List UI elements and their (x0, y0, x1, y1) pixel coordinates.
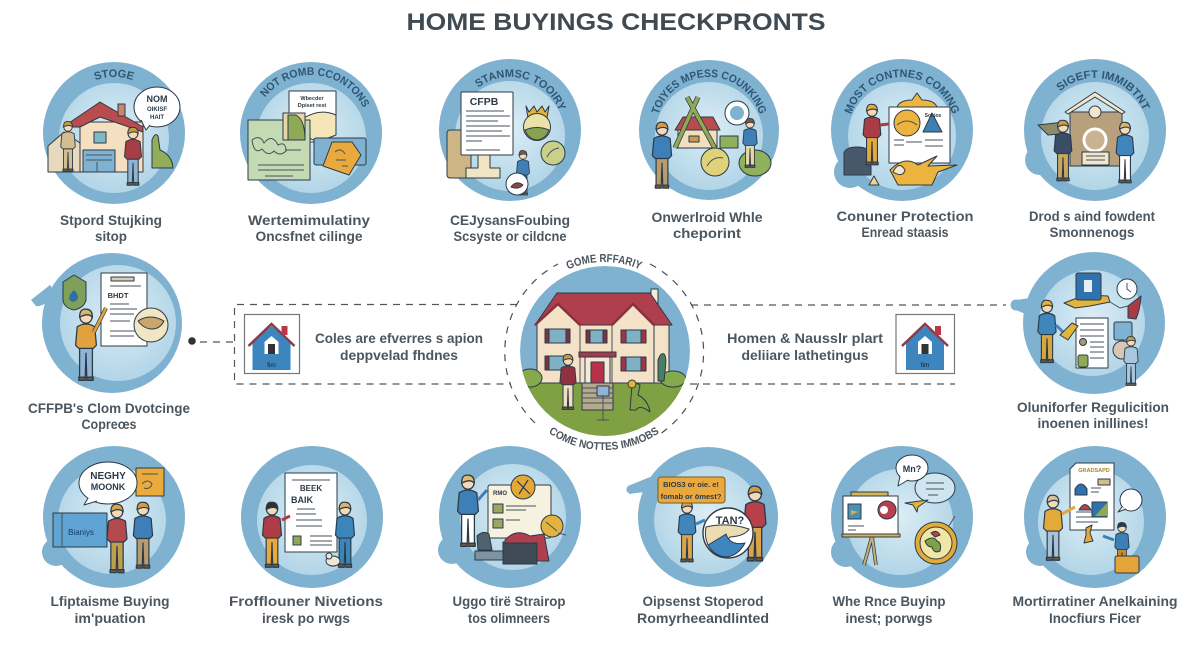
label: cheporint (673, 225, 741, 241)
icon: flyer, two people and suitcase (1044, 463, 1142, 573)
panel: sigeft immibtnt (1024, 59, 1166, 201)
label (836, 208, 974, 240)
icon: presenter, board and boxes: RMO (493, 491, 507, 497)
label: CFFPB's Clom Dvotcinge (28, 400, 190, 416)
label: CEJysansFoubing (450, 212, 570, 228)
label: Frofflouner Nivetions (229, 593, 383, 609)
label: Scsyste or cildcne (454, 228, 567, 244)
dashed ring with curved text: GOME RFFARIY (566, 254, 643, 269)
icon: stacked documents: Wbecder (300, 96, 324, 102)
icon: easel, bubbles and compass (842, 455, 957, 565)
icon: document, woman, man and dog: BAIK (291, 495, 313, 505)
dashed ring with curved text (504, 254, 704, 450)
panel: CFPB document (31, 253, 182, 393)
label: tos olimneers (468, 610, 550, 626)
label (60, 212, 162, 244)
label (50, 593, 170, 626)
icon: CFPB document with badges (447, 92, 565, 195)
icon: house with two people and speech bubble: NOM (146, 94, 168, 104)
label: Inocfiurs Ficer (1049, 610, 1142, 626)
icon: sign, people and magnifier: fomab or ömest? (661, 492, 722, 501)
ring heading: NOT ROMB CCONTONS (260, 67, 369, 107)
ring heading: TOIYES MPESS COUNKING (651, 69, 766, 114)
ring heading: MOST CONTNES COMING (844, 69, 959, 114)
label: Romyrheeandlinted (637, 610, 769, 626)
label: Drod s aind fowdent (1029, 208, 1155, 224)
dashed ring with curved text: COME NOTTES IMMOBS (550, 427, 658, 450)
label (652, 209, 763, 241)
ring heading: SIGEFT IMMIBTNT (1056, 70, 1150, 108)
label (229, 593, 383, 626)
icon: house in frame (896, 314, 954, 374)
label (1012, 593, 1178, 626)
panel: regulation (1010, 252, 1165, 394)
house scene (515, 266, 695, 442)
label: im'puation (74, 610, 146, 626)
panel: most contnes coming (831, 59, 973, 201)
icon: flyer, two people and suitcase: GRADSAPD (1078, 468, 1110, 474)
icon: CFPB document with badges: CFPB (470, 96, 499, 108)
callout: right dashed box (690, 305, 1006, 384)
icon: document, woman, man and dog (263, 473, 354, 567)
label: Stpord Stujking (60, 212, 162, 228)
label (28, 400, 190, 432)
label: Conuner Protection (836, 208, 974, 224)
icon: consumer protection board: Sobios (925, 113, 942, 119)
label: Uggo tirë Strairop (452, 593, 566, 609)
label (832, 593, 946, 626)
label (637, 593, 769, 626)
ring heading: STANMSC TOOIRY (475, 69, 566, 108)
panel: bottom 2 (241, 446, 383, 588)
icon: house in frame: ﬁm (921, 362, 929, 369)
icon: sign, people and magnifier (658, 477, 766, 562)
icon: person, book, clock and document (1038, 273, 1141, 385)
icon: speech bubble, box and two people: Bianiys (68, 528, 94, 537)
panel: bottom 6 (1024, 446, 1166, 588)
icon: stacked documents: Dpiset rest (298, 103, 326, 109)
connector: dot to left box (188, 337, 234, 345)
icon: speech bubble, box and two people (53, 462, 164, 573)
panel: bottom 3 (438, 446, 581, 588)
label: Mortirratiner Anelkaining (1012, 593, 1178, 609)
ring heading: STOGE (94, 69, 134, 80)
center hero: home illustration (504, 254, 704, 450)
icon: house with two people and speech bubble: HAIT (150, 115, 164, 121)
icon: speech bubble, box and two people: MOONK (91, 482, 126, 492)
label: Oncsfnet cilinge (256, 228, 363, 244)
icon: shield, document, person and map (63, 273, 168, 380)
icon: house with two people and speech bubble: OIKISF (147, 107, 167, 113)
callout text (727, 330, 883, 363)
icon: document, woman, man and dog: BEEK (300, 484, 322, 493)
label: Lfiptaisme Buying (50, 593, 170, 609)
icon: speech bubble, box and two people: NEGHY (90, 471, 126, 482)
label (1029, 208, 1155, 240)
icon: stacked documents (248, 91, 366, 180)
label (1017, 399, 1169, 431)
icon: house in frame (244, 314, 300, 374)
label: Onwerlroid Whle (652, 209, 763, 225)
callout text: deliiare lathetingus (742, 347, 869, 363)
panel: stoge checkpoint (43, 62, 185, 204)
panel: not romb contons (240, 62, 382, 204)
label: Copreœs (82, 416, 137, 432)
panel: bottom 5 (831, 446, 973, 588)
panel: bottom 1 (42, 446, 185, 588)
callout text: Coles are efverres s apion (315, 330, 483, 346)
icon: house and two people (1038, 92, 1134, 183)
label (450, 212, 570, 244)
label: Wertemimulatiny (248, 212, 370, 228)
label: Whe Rnce Buyinp (832, 593, 946, 609)
label: inoenen inillines! (1038, 415, 1148, 431)
label: Oipsenst Stoperod (642, 593, 764, 609)
icon: easel, bubbles and compass: Mn? (903, 464, 921, 474)
panel: toiyes mpess counking (639, 60, 779, 200)
icon: sign, people and magnifier: BIOS3 or oie. e! (663, 480, 719, 489)
label: Oluniforfer Regulicition (1017, 399, 1169, 415)
label (248, 212, 370, 244)
panel: bottom 4 (626, 447, 778, 587)
icon: presenter, board and boxes (458, 475, 566, 564)
callout: left dashed box (234, 304, 517, 384)
icon: consumer protection board (844, 93, 957, 185)
label: sitop (95, 228, 127, 244)
icon: house, tools and two people (652, 97, 771, 188)
label (452, 593, 566, 626)
callout text: deppvelad fhdnes (340, 347, 458, 363)
icon: sign, people and magnifier: TAN? (716, 515, 745, 527)
icon: shield, document, person and map: BHDT (108, 291, 129, 300)
callout text: Homen & Nausslr plart (727, 330, 883, 346)
callout text (315, 330, 483, 363)
label: iresk po rwgs (262, 610, 350, 626)
label: Smonnenogs (1050, 224, 1135, 240)
panel: stanmsc tooiry (439, 59, 581, 201)
label: inest; porwgs (846, 610, 933, 626)
title: HOME BUYINGS CHECKPRONTS (406, 9, 826, 36)
icon: house with two people and speech bubble (48, 87, 180, 185)
label: Enread staasis (862, 224, 949, 240)
icon: house in frame: ﬁm (267, 362, 276, 369)
